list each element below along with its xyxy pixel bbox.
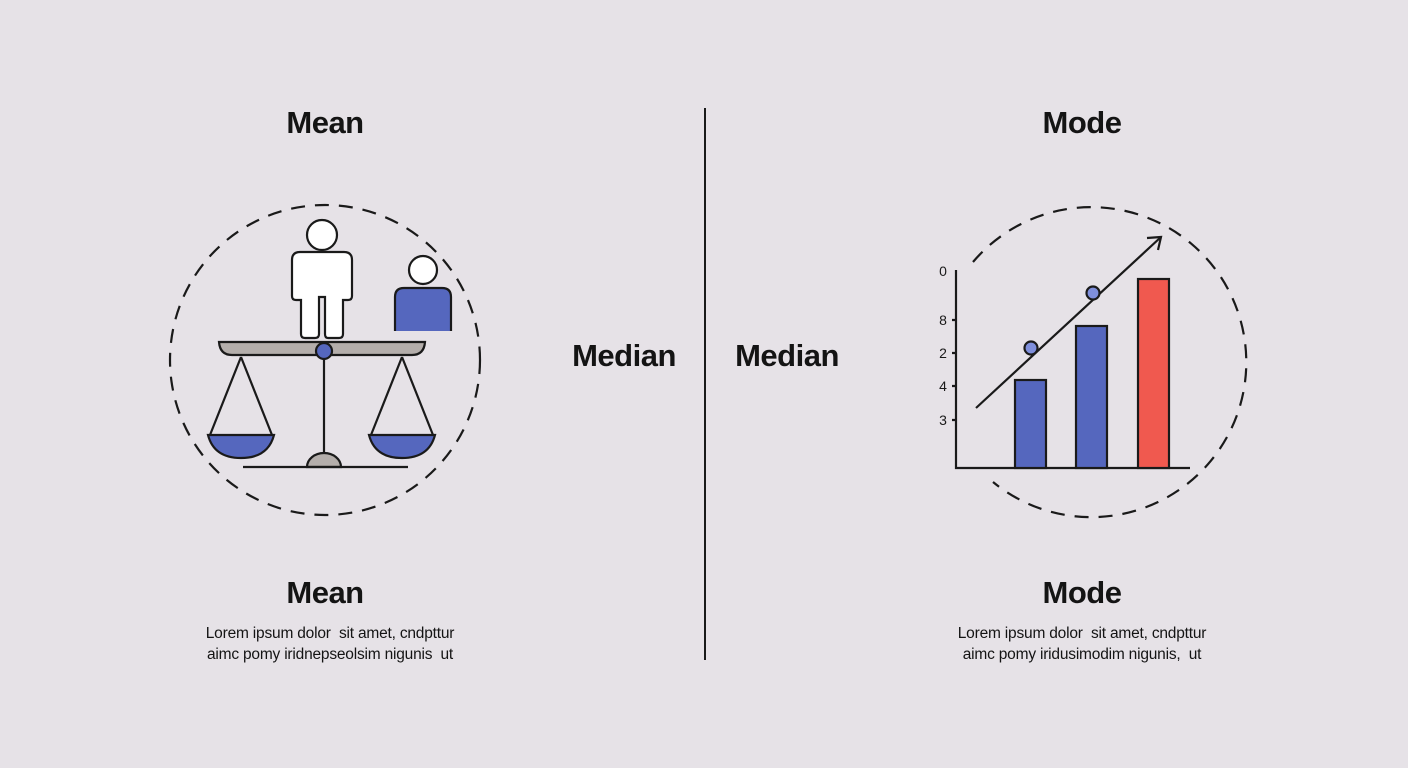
divider line	[704, 108, 706, 660]
text block: mode description: Lorem ipsum dolor sit amet, cndpttur	[958, 625, 1206, 642]
beam	[219, 342, 425, 355]
label: Median right: Median	[735, 338, 839, 373]
title: Mean: Mean	[286, 105, 364, 140]
text block: mode description	[958, 625, 1206, 663]
big person	[292, 220, 352, 338]
text block: mode description: aimc pomy iridusimodim nigunis, ut	[963, 646, 1201, 663]
chart: bar chart with trend arrow: 4	[939, 378, 947, 394]
heading: Mode: Mode	[1043, 575, 1121, 610]
label: Median left: Median	[572, 338, 676, 373]
heading: Mean: Mean	[286, 575, 364, 610]
small person	[409, 256, 437, 284]
text block: mean description: aimc pomy iridnepseolsim nigunis ut	[207, 646, 453, 663]
text block: mean description	[206, 625, 454, 663]
text block: mean description: Lorem ipsum dolor sit amet, cndpttur	[206, 625, 454, 642]
pans	[210, 357, 433, 435]
chart: bar chart with trend arrow: 2	[939, 345, 947, 361]
chart: bar chart with trend arrow: 8	[939, 312, 947, 328]
title: Mode: Mode	[1043, 105, 1121, 140]
chart: bar chart with trend arrow	[939, 207, 1246, 517]
chart: bar chart with trend arrow: 3	[939, 412, 947, 428]
chart: bar chart with trend arrow: 0	[939, 263, 947, 279]
icon: balance scale with people	[170, 205, 480, 515]
